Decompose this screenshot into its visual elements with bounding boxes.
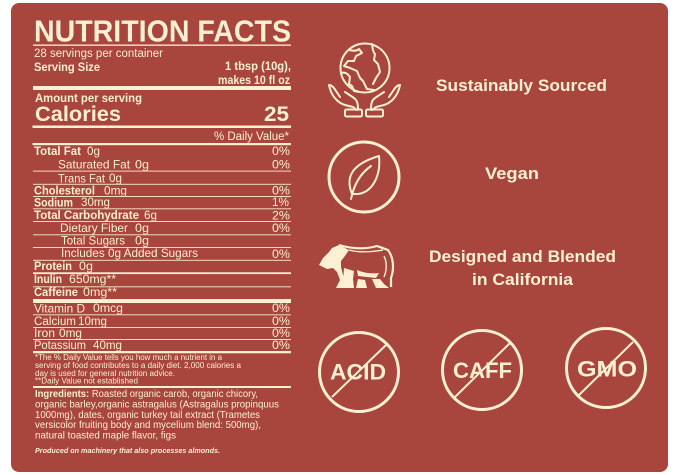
nutrient rows: 0g bbox=[79, 259, 93, 273]
ingredients: 1000mg), dates, organic turkey tail extract (Trametes bbox=[35, 409, 260, 421]
nutrient rows: Cholesterol bbox=[34, 184, 95, 198]
nutrient rows: 40mg bbox=[93, 338, 122, 352]
nutrient rows: 6g bbox=[144, 208, 157, 222]
label: designed and blended in california: in California bbox=[472, 270, 574, 289]
nutrient rows: 0% bbox=[272, 314, 290, 328]
panel: nutrition facts label bbox=[32, 14, 291, 455]
nutrient rows: Total Fat bbox=[34, 144, 81, 158]
nutrient rows: 0% bbox=[272, 301, 290, 315]
badge: no gmo bbox=[566, 328, 646, 408]
title: NUTRITION FACTS bbox=[34, 14, 291, 48]
nutrient rows: 0% bbox=[272, 338, 290, 352]
badge: no caffeine bbox=[442, 330, 522, 410]
label: vegan: Vegan bbox=[485, 164, 539, 183]
nutrient rows bbox=[33, 144, 291, 353]
nutrient rows: Calcium bbox=[34, 314, 76, 328]
nutrient rows: 0g bbox=[135, 158, 149, 172]
nutrient rows: Saturated Fat bbox=[58, 158, 131, 172]
calories block: 25 bbox=[264, 103, 289, 126]
badge: no caffeine: CAFF bbox=[453, 358, 512, 383]
icon: california bear bbox=[319, 245, 393, 288]
badge: no acid bbox=[320, 332, 398, 412]
nutrient rows: 0% bbox=[272, 221, 290, 235]
calories block: Calories bbox=[35, 103, 121, 126]
label: designed and blended in california: Designed and Blended bbox=[429, 247, 616, 266]
nutrient rows: Caffeine bbox=[34, 285, 78, 299]
footnote: **Daily Value not established bbox=[35, 376, 138, 386]
nutrient rows: 650mg** bbox=[69, 272, 116, 286]
footnote: serving of food contributes to a daily diet. 2,000 calories a bbox=[35, 361, 242, 370]
calories block: % Daily Value* bbox=[214, 131, 290, 143]
nutrient rows: Potassium bbox=[34, 338, 86, 352]
allergen note: Produced on machinery that also processes almonds. bbox=[35, 446, 220, 455]
servings block: 28 servings per container bbox=[34, 48, 163, 60]
label: sustainably sourced: Sustainably Sourced bbox=[436, 76, 607, 95]
servings block: 1 tbsp (10g), bbox=[225, 61, 291, 73]
nutrient rows: 0% bbox=[272, 184, 290, 198]
nutrient rows: 30mg bbox=[81, 195, 110, 209]
icon: leaf in circle bbox=[329, 142, 399, 212]
nutrient rows: 0% bbox=[272, 144, 290, 158]
badge: no gmo: GMO bbox=[577, 356, 637, 382]
nutrient rows: Includes 0g Added Sugars bbox=[61, 246, 198, 260]
nutrient rows: Total Sugars bbox=[61, 234, 125, 248]
ingredients: organic barley,organic astragalus (Astragalus propinquus bbox=[35, 398, 279, 410]
nutrient rows: 0% bbox=[272, 247, 290, 261]
nutrient rows: 0mcg bbox=[93, 301, 123, 315]
nutrient rows: 1% bbox=[272, 195, 289, 209]
nutrient rows: Dietary Fiber bbox=[60, 221, 128, 235]
footnote bbox=[33, 353, 291, 388]
nutrient rows: 0mg** bbox=[83, 285, 117, 299]
servings block: Serving Size bbox=[34, 62, 100, 74]
ingredients bbox=[35, 388, 279, 442]
nutrient rows: 0g bbox=[87, 144, 100, 158]
nutrient rows: 0g bbox=[135, 221, 149, 235]
footnote: day is used for general nutrition advice. bbox=[35, 369, 175, 378]
nutrient rows: Vitamin D bbox=[34, 302, 85, 316]
nutrient rows: Sodium bbox=[34, 196, 73, 210]
icon: globe in hands bbox=[329, 44, 400, 116]
footnote: *The % Daily Value tells you how much a nutrient in a bbox=[35, 353, 223, 362]
ingredients: versicolor fruiting body and mycelium blend: 500mg), bbox=[35, 419, 261, 431]
badge: no acid: ACID bbox=[330, 360, 386, 384]
nutrient rows: 2% bbox=[272, 208, 290, 222]
nutrient rows: 0g bbox=[109, 171, 122, 185]
servings block bbox=[33, 44, 291, 90]
ingredients: Ingredients: Roasted organic carob, organic chicory, bbox=[35, 388, 258, 400]
nutrient rows: Trans Fat bbox=[58, 172, 106, 186]
nutrient rows: 10mg bbox=[78, 314, 107, 328]
calories block bbox=[32, 93, 291, 145]
nutrient rows: Inulin bbox=[34, 272, 62, 286]
label: designed and blended in california bbox=[429, 247, 616, 289]
nutrient rows: 0% bbox=[272, 326, 290, 340]
nutrient rows: 0g bbox=[135, 234, 149, 248]
nutrient rows: Iron bbox=[34, 326, 55, 340]
nutrient rows: 0mg bbox=[104, 184, 127, 198]
ingredients: natural toasted maple flavor, figs bbox=[35, 430, 176, 442]
nutrient rows: 0% bbox=[272, 158, 290, 172]
nutrient rows: 0mg bbox=[59, 326, 82, 340]
calories block: Amount per serving bbox=[35, 93, 142, 105]
nutrient rows: Protein bbox=[34, 259, 72, 273]
servings block: makes 10 fl oz bbox=[218, 75, 290, 87]
nutrient rows: Total Carbohydrate bbox=[34, 208, 139, 222]
